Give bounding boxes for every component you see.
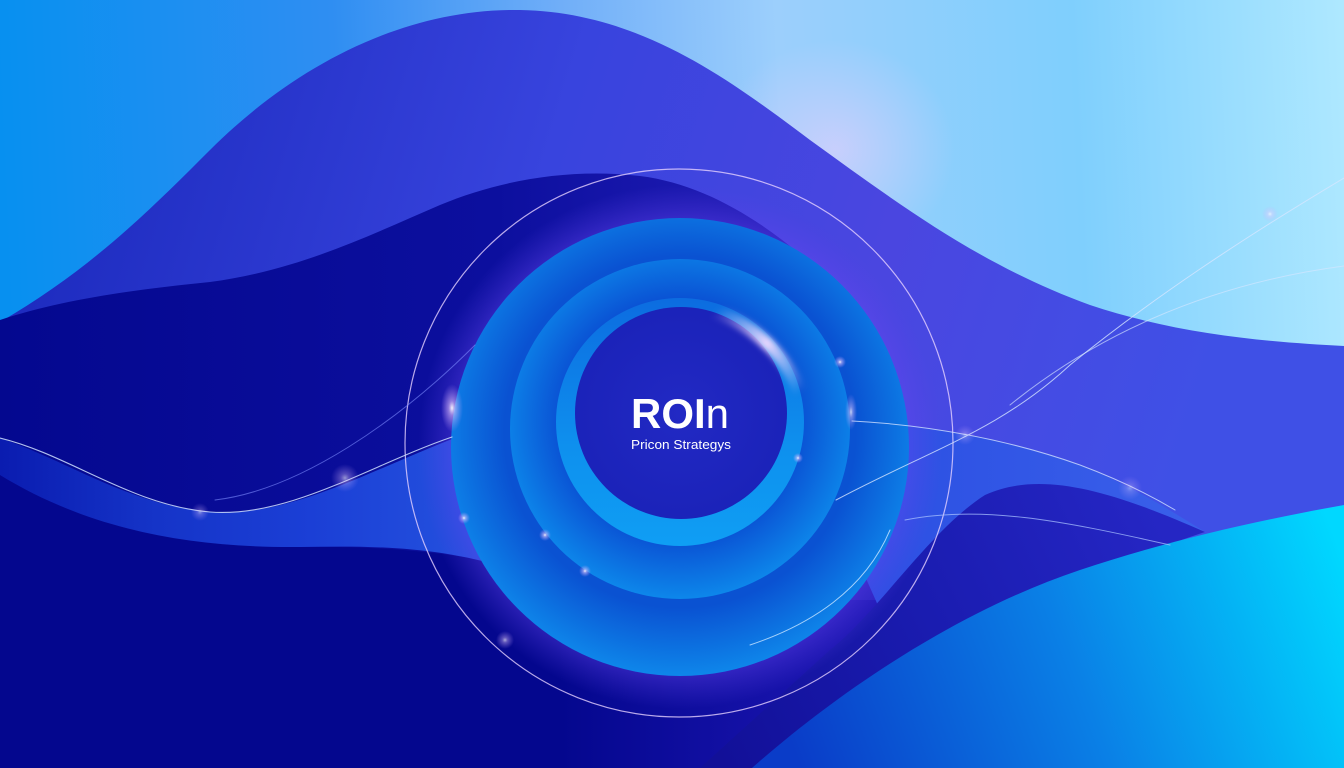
- large blue disc: [451, 218, 909, 676]
- lower right line: [905, 514, 1170, 545]
- upper right line: [836, 178, 1344, 500]
- bottom-right cyan wave: [752, 505, 1344, 768]
- middle right line: [852, 421, 1175, 510]
- ring highlight: [715, 312, 800, 392]
- flowing light lines: [0, 178, 1344, 645]
- left light line: [0, 437, 452, 512]
- lavender sky glow: [715, 40, 955, 260]
- outer thin ring: [405, 169, 953, 717]
- left glow: [441, 384, 463, 432]
- halo behind disc: [418, 185, 942, 709]
- central subtitle: Pricon Strategys: [631, 437, 732, 452]
- lower dark band: [0, 475, 880, 768]
- glow points: [191, 206, 1278, 649]
- left blue ribbon: [0, 436, 520, 572]
- inner blue ring: [556, 298, 804, 546]
- middle blue disc: [510, 259, 850, 599]
- second right line: [1010, 266, 1344, 405]
- right glow: [845, 394, 857, 430]
- concentric ring group: [405, 169, 953, 717]
- lower arc line: [750, 530, 890, 645]
- left faint line: [215, 345, 475, 500]
- central title: ROIn: [631, 390, 729, 437]
- central dark disc: [575, 307, 787, 519]
- small glows: [834, 356, 846, 368]
- dark navy wave: [0, 174, 900, 768]
- dark lower-right wave: [700, 484, 1205, 768]
- upper indigo wave: [0, 10, 1344, 600]
- right blue ribbon: [840, 420, 1205, 610]
